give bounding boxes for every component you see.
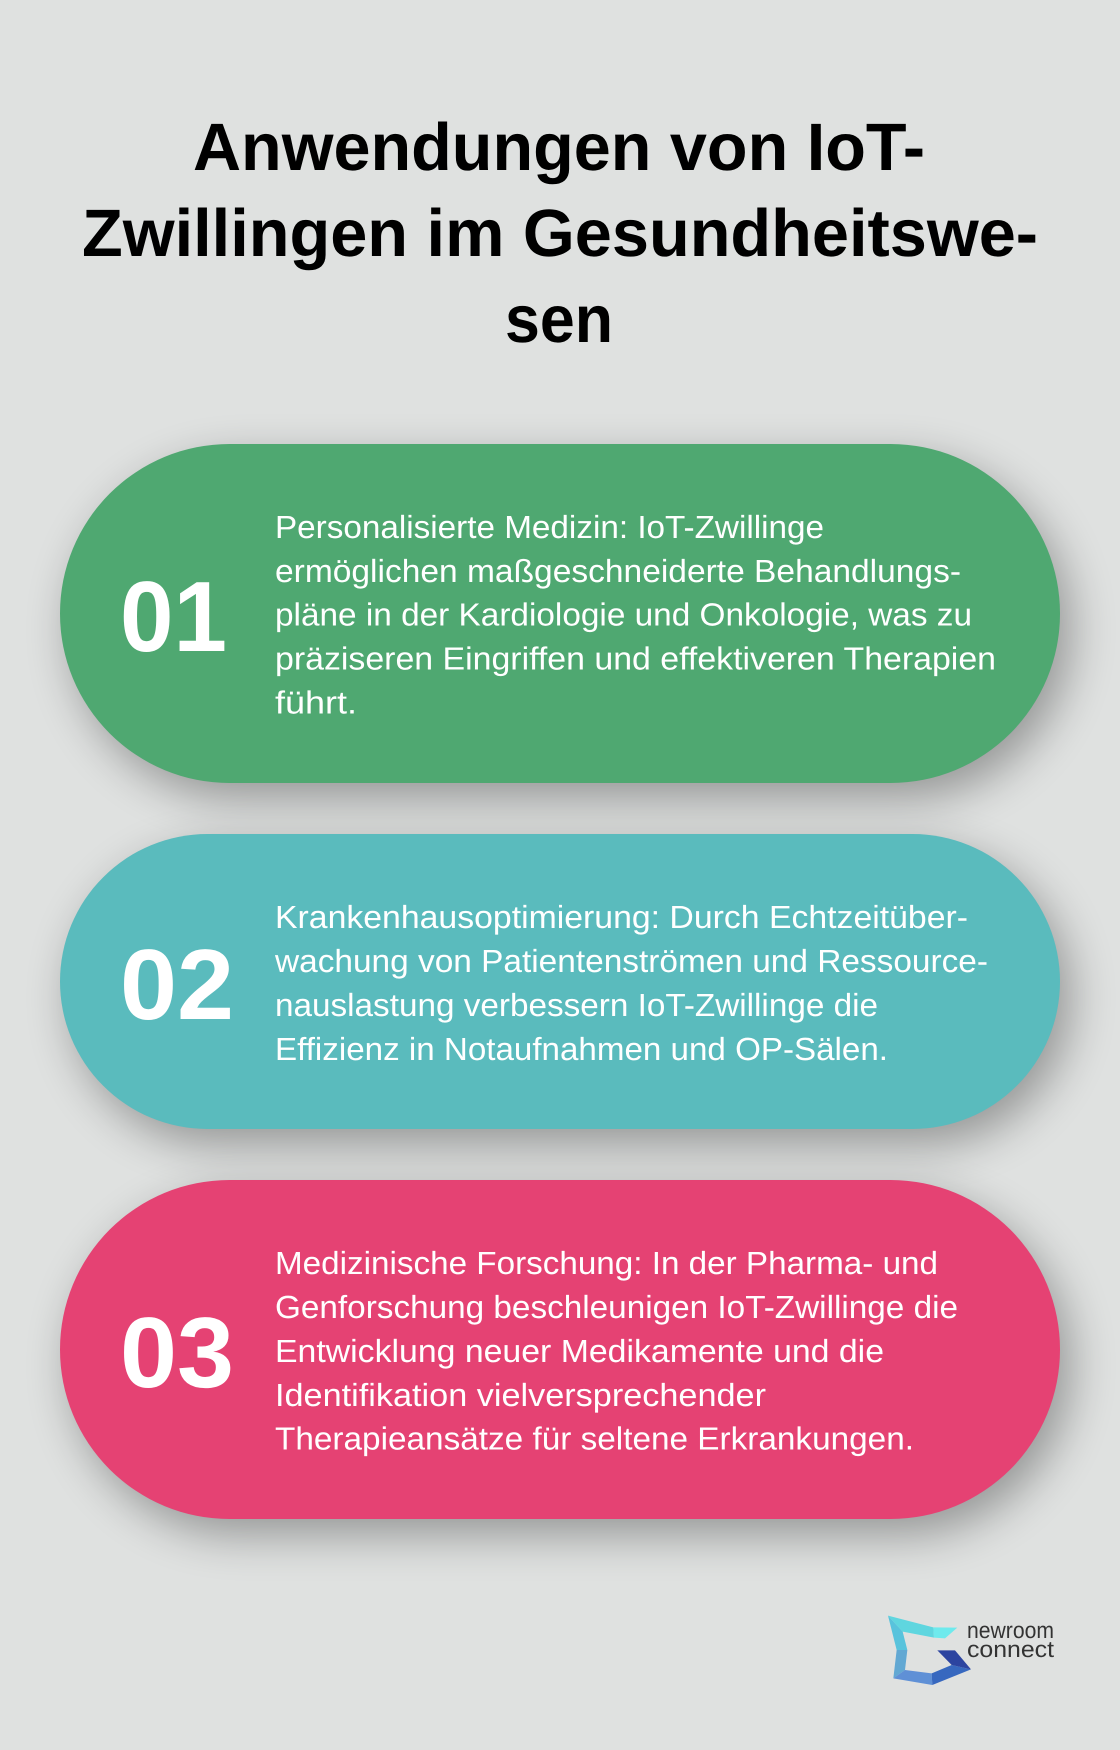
text block: Medizinische Forschung: Genforschung beschleunigen IoT-Zwillinge die <box>275 1289 958 1325</box>
text block: Personalisierte Medizin: Personalisierte Medizin: IoT-Zwillinge <box>275 509 824 545</box>
text block: Personalisierte Medizin: führt. <box>275 684 357 720</box>
text block: Personalisierte Medizin: pläne in der Kardiologie und Onkologie, was zu <box>275 596 972 632</box>
text block: Medizinische Forschung <box>275 1245 958 1456</box>
title: sen <box>505 282 613 357</box>
text block: Medizinische Forschung: Therapieansätze für seltene Erkrankungen. <box>275 1420 914 1456</box>
title <box>82 110 1038 357</box>
panel: 01 Personalisierte Medizin <box>60 444 1060 783</box>
panel: 02 Krankenhausoptimierung <box>60 834 1060 1129</box>
text block: Medizinische Forschung: Medizinische Forschung: In der Pharma- und <box>275 1245 938 1281</box>
text block: Medizinische Forschung: Identifikation vielversprechender <box>275 1377 766 1413</box>
icon: logo mark <box>888 1616 971 1685</box>
text block: Personalisierte Medizin <box>275 509 996 720</box>
text block: Personalisierte Medizin: präziseren Eingriffen und effektiveren Therapien <box>275 640 996 676</box>
text block: Krankenhausoptimierung <box>274 899 988 1067</box>
title: Anwendungen von IoT- <box>193 110 925 185</box>
logo wordmark: newroom <box>967 1617 1054 1643</box>
text block: Krankenhausoptimierung: wachung von Patientenströmen und Ressource- <box>274 943 988 979</box>
text block: Medizinische Forschung: Entwicklung neuer Medikamente und die <box>275 1333 884 1369</box>
title: Zwillingen im Gesundheitswe- <box>82 196 1038 271</box>
text block: Personalisierte Medizin: ermöglichen maßgeschneiderte Behandlungs- <box>275 553 961 589</box>
text block: Krankenhausoptimierung: Effizienz in Notaufnahmen und OP-Sälen. <box>275 1031 888 1067</box>
text block: Krankenhausoptimierung: Krankenhausoptimierung: Durch Echtzeitüber- <box>275 899 968 935</box>
number 03: 03 <box>120 1297 234 1409</box>
logo wordmark: connect <box>967 1636 1055 1662</box>
logo wordmark <box>967 1617 1055 1662</box>
panel: 03 Medizinische Forschung <box>60 1180 1060 1519</box>
number 02: 02 <box>120 929 234 1041</box>
logo: newroom connect <box>888 1616 1055 1685</box>
text block: Krankenhausoptimierung: nauslastung verbessern IoT-Zwillinge die <box>275 987 878 1023</box>
number 01: 01 <box>120 561 227 673</box>
